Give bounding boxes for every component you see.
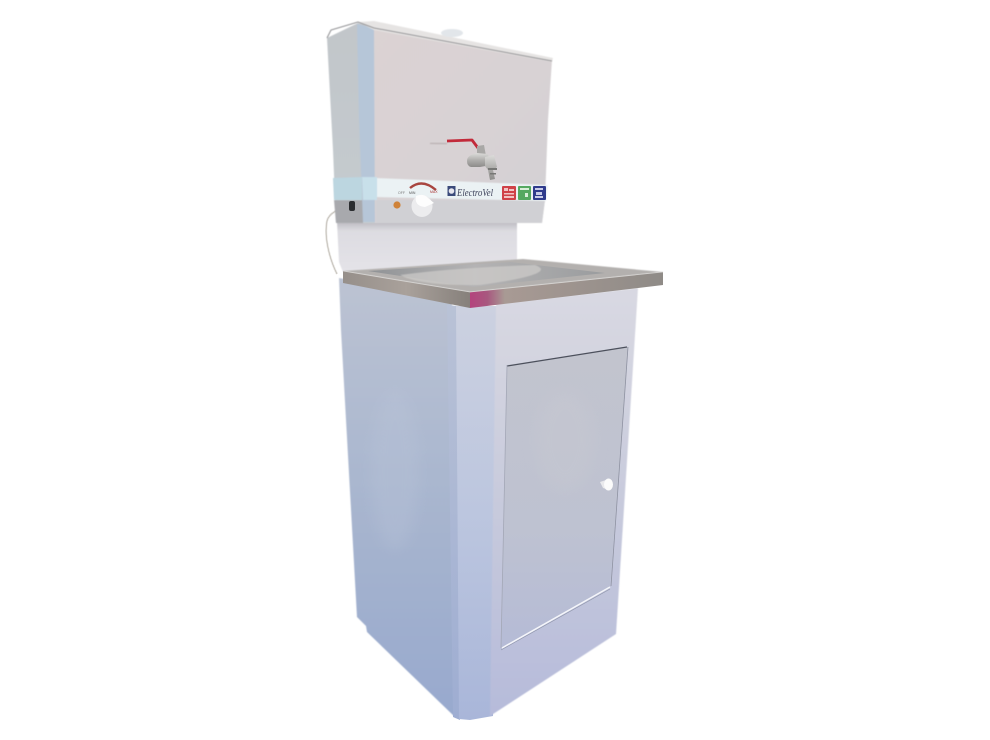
brand logo [448,186,456,196]
basin reflection [400,265,541,285]
temperature dial scale [410,183,436,190]
cabinet [339,278,638,720]
sink left rim [343,271,470,308]
red lever handle [447,140,478,148]
lid back-edge shadow [327,22,552,61]
control label band: MAX [430,190,438,194]
tap spout [485,155,497,180]
tank lid edge [358,21,553,62]
power cord [326,206,350,274]
certification badge: green [518,186,531,200]
sink front rim [470,272,663,308]
door right edge [611,347,628,586]
tap valve stem [477,145,486,156]
lid bump [441,29,463,37]
door mottling [535,390,595,490]
tank front shade below band [376,200,545,223]
stainless steel sink [343,259,663,308]
control label band: MIN [409,191,416,195]
left face mottling [371,390,419,550]
control label band [333,177,548,217]
cabinet front face [490,288,638,716]
door knob [600,478,613,490]
rim top highlight [343,271,663,292]
tank front face [374,28,552,223]
cabinet left face [339,278,456,718]
scale labels: OFF [398,191,405,195]
certification badge: blue [533,186,546,200]
power socket [349,201,355,211]
tap body [467,153,491,167]
sink top surface [343,259,663,292]
tank side face [327,23,375,223]
tank corner strip [357,24,377,222]
door bottom highlight [502,587,610,648]
thermostat knob [412,195,434,217]
tank side shade below band [334,200,363,223]
door [501,347,628,650]
cabinet corner panel [456,306,500,720]
tap lever shadow [430,143,447,144]
water tank [327,21,553,223]
certification badge: red [502,186,516,200]
backsplash panel [337,222,517,272]
water tap [430,140,497,180]
cabinet corner strip [447,305,460,720]
brand name: ElectroVel [456,188,493,199]
indicator lamp [393,201,401,209]
basin recess [368,262,605,287]
door top shadow line [507,347,627,366]
